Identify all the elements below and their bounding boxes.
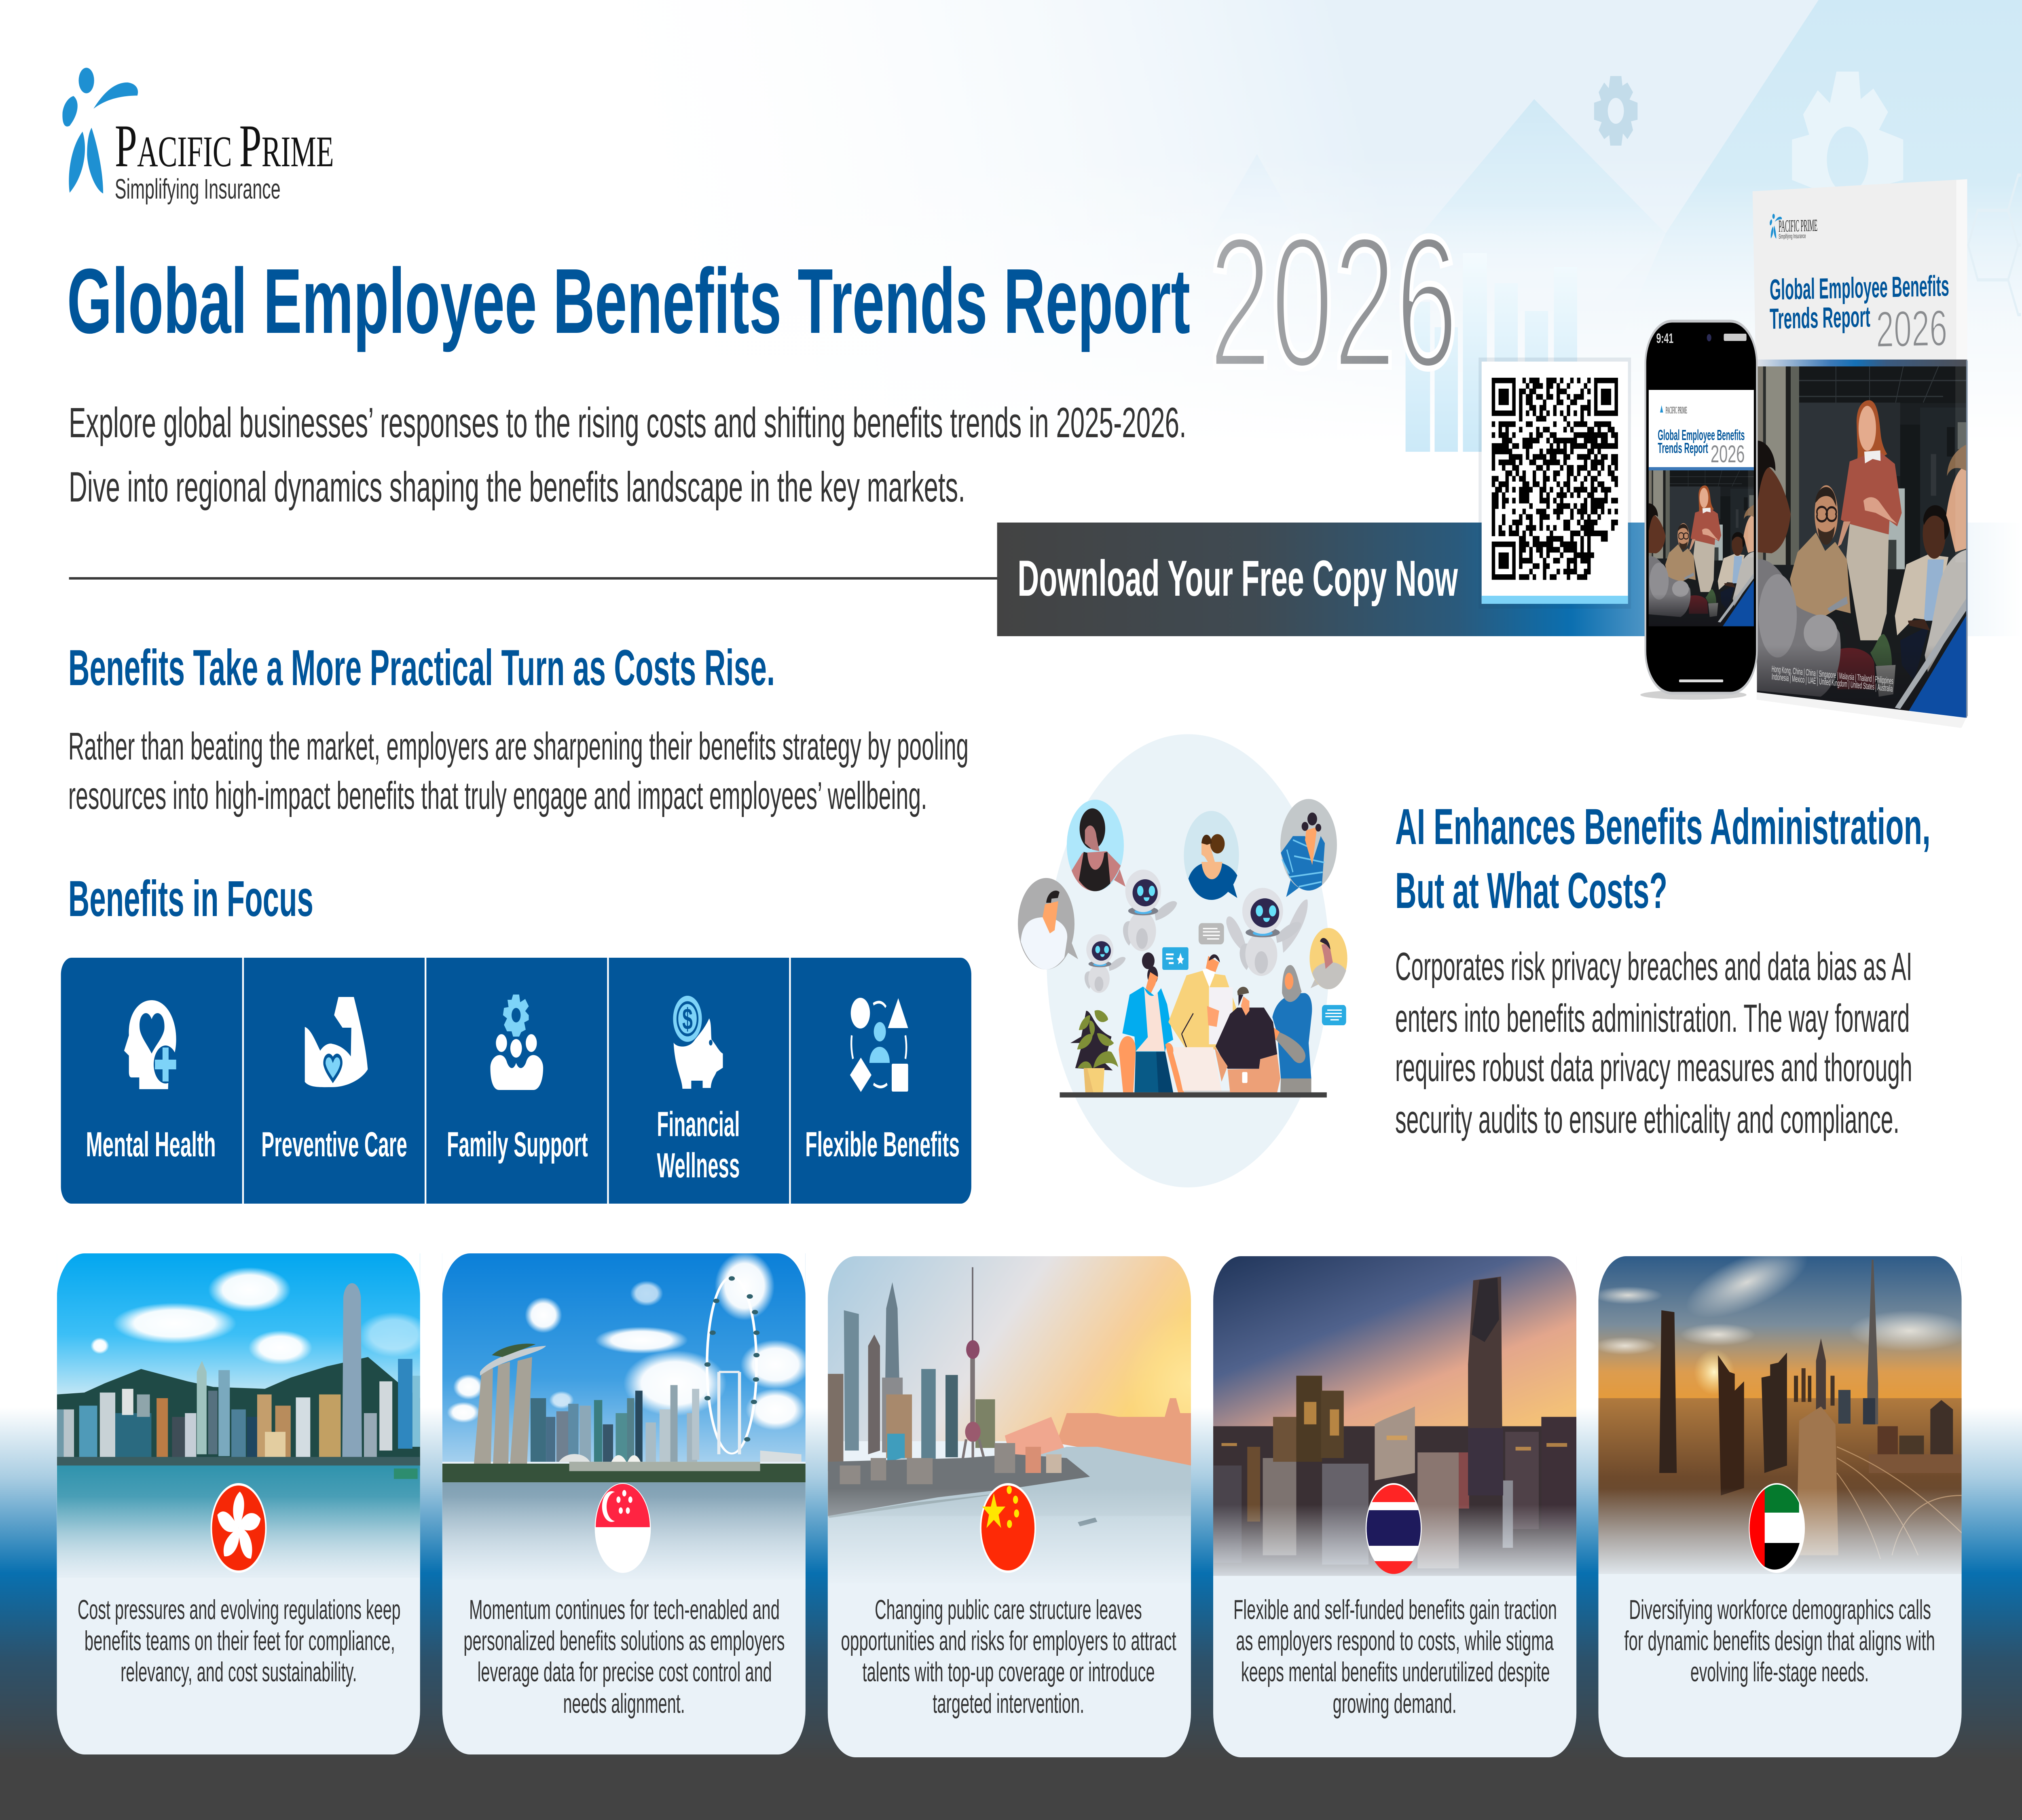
text: UAE: for dynamic benefits design that aligns with	[1624, 1626, 1935, 1657]
top background wash	[0, 0, 2022, 526]
phone status bar: 9:41	[1656, 331, 1673, 346]
icon: logo figure	[62, 68, 138, 194]
logo: Pacific Prime: PACIFIC PRIME	[115, 113, 334, 180]
flag: Thailand	[1366, 1483, 1422, 1574]
text: Thailand	[1233, 1595, 1557, 1719]
download banner	[997, 523, 2022, 636]
text: Thailand: keeps mental benefits underutilized despite	[1241, 1657, 1550, 1688]
woman hijab	[1268, 965, 1312, 1092]
icon: financial wellness	[673, 996, 723, 1089]
section: benefits practical turn: Rather than beating the market, employers are sharpening their benefits strategy by pooling	[68, 725, 969, 768]
avatar: small right man	[1309, 928, 1347, 989]
download banner: Download Your Free Copy Now	[1017, 550, 1458, 607]
card: UAE	[1593, 1232, 1970, 1757]
text: UAE	[1624, 1595, 1935, 1688]
robots	[1123, 870, 1177, 951]
section: benefits practical turn	[68, 640, 969, 817]
book cover text: 2026	[1876, 300, 1948, 358]
photo: Bangkok skyline	[1213, 1254, 1576, 1592]
section: AI enhances benefits: AI Enhances Benefits Administration,	[1395, 799, 1931, 855]
text: China: targeted intervention.	[933, 1689, 1084, 1719]
flag: Singapore	[595, 1483, 651, 1573]
text: UAE: evolving life-stage needs.	[1690, 1657, 1869, 1688]
text: Thailand: as employers respond to costs, while stigma	[1236, 1626, 1554, 1657]
man dark	[1214, 987, 1280, 1092]
flag: Hong Kong	[211, 1483, 266, 1573]
phone mockup	[1640, 321, 1757, 700]
woman left	[1119, 952, 1184, 1092]
phone screen cover: PACIFIC PRIME	[1666, 405, 1687, 416]
book cover text: Global Employee Benefits	[1770, 269, 1949, 306]
title: Global Employee Benefits Trends Report	[67, 250, 1190, 353]
decorative mountains, gears and bars	[1163, 0, 2022, 452]
logo: Pacific Prime: Simplifying Insurance	[115, 174, 281, 205]
labels	[86, 1105, 960, 1185]
plant	[1070, 1010, 1118, 1092]
text: Singapore: leverage data for precise cost control and	[478, 1657, 772, 1688]
laptop	[1173, 1047, 1239, 1093]
flag: China	[980, 1483, 1036, 1573]
title year 2026: 2026	[1209, 197, 1458, 406]
text: China	[841, 1595, 1176, 1719]
phone screen cover: Global Employee Benefits	[1658, 427, 1745, 443]
section: AI enhances benefits: But at What Costs?	[1395, 863, 1667, 919]
section: AI enhances benefits	[1395, 799, 1931, 1142]
text: Thailand: growing demand.	[1333, 1689, 1457, 1719]
QR code card	[1478, 358, 1631, 609]
intro text	[69, 399, 1187, 511]
phone screen cover: Trends Report	[1658, 440, 1708, 456]
man yellow	[1168, 954, 1237, 1050]
text: UAE: Diversifying workforce demographics calls	[1629, 1595, 1931, 1625]
icon: mental health	[124, 1000, 178, 1089]
photo: Shanghai skyline	[828, 1254, 1258, 1592]
icon: preventive care	[305, 997, 368, 1087]
book cover text: Simplifying Insurance	[1779, 232, 1806, 240]
text: China: talents with top-up coverage or introduce	[862, 1657, 1155, 1688]
text: Hong Kong: relevancy, and cost sustainability.	[121, 1657, 357, 1688]
labels: Financial	[657, 1105, 740, 1144]
book cover small logo	[1770, 214, 1782, 239]
text: Singapore: personalized benefits solutions as employers	[463, 1626, 785, 1657]
text: Hong Kong	[78, 1595, 401, 1688]
book cover text: Indonesia | Mexico | UAE | United Kingdom | United States | Australia	[1771, 671, 1893, 694]
icon: flexible benefits	[850, 998, 908, 1092]
labels: Wellness	[657, 1146, 740, 1185]
labels: Flexible Benefits	[805, 1125, 960, 1164]
photo: Dubai skyline	[1593, 1232, 1970, 1592]
avatar: man with striped shirt	[1280, 799, 1337, 897]
avatar: woman with bun	[1184, 811, 1239, 900]
avatar: woman with afro	[1067, 800, 1125, 891]
book cover text: PACIFIC PRIME	[1779, 216, 1817, 236]
phone screen photo	[1649, 470, 1754, 626]
phone screen cover: 2026	[1711, 440, 1745, 468]
card: Singapore	[442, 1251, 811, 1754]
text: Thailand: Flexible and self-funded benefits gain traction	[1233, 1595, 1557, 1625]
QR pattern	[1492, 381, 1618, 577]
section: benefits practical turn: resources into high-impact benefits that truly engage and impact employees’ wellbeing.	[68, 774, 927, 817]
chat chips	[1162, 923, 1346, 1025]
labels: Mental Health	[86, 1125, 216, 1164]
card: Hong Kong	[57, 1252, 430, 1754]
flag: UAE	[1749, 1483, 1805, 1573]
labels: Preventive Care	[261, 1125, 407, 1164]
panel: benefits in focus bar	[61, 958, 971, 1204]
book cover text: Hong Kong, China | China | Singapore | Malaysia | Thailand | Philippines	[1771, 664, 1893, 686]
robot small	[1085, 934, 1125, 993]
phone screen cover	[1649, 390, 1754, 470]
text: China: opportunities and risks for employers to attract	[841, 1626, 1176, 1657]
photo: Singapore skyline	[442, 1251, 811, 1589]
icon: family support	[490, 995, 543, 1090]
text: Hong Kong: Cost pressures and evolving regulations keep	[78, 1595, 401, 1625]
robot large	[1226, 888, 1308, 976]
phone status bar	[1656, 331, 1747, 346]
section: AI enhances benefits: enters into benefits administration. The way forward	[1395, 997, 1910, 1041]
avatar: left man	[1018, 878, 1078, 969]
intro text: Explore global businesses’ responses to the rising costs and shifting benefits trends in 2025-2026.	[69, 399, 1187, 447]
book cover text: Trends Report	[1770, 301, 1870, 335]
book cover text	[1770, 216, 1949, 694]
section: AI enhances benefits: requires robust data privacy measures and thorough	[1395, 1046, 1912, 1090]
logo: Pacific Prime	[62, 68, 334, 205]
team figures	[1119, 952, 1312, 1093]
text: China: Changing public care structure leaves	[875, 1595, 1142, 1625]
section: AI enhances benefits: Corporates risk privacy breaches and data bias as AI	[1395, 945, 1912, 989]
icon: financial wellness: $	[682, 1003, 693, 1036]
card: China	[828, 1254, 1258, 1757]
text: Singapore: needs alignment.	[563, 1689, 685, 1719]
card: Thailand	[1213, 1254, 1576, 1757]
text: Singapore	[463, 1595, 785, 1719]
text: Singapore: Momentum continues for tech-enabled and	[469, 1595, 780, 1625]
intro text: Dive into regional dynamics shaping the benefits landscape in the key markets.	[69, 463, 965, 511]
photo lower edge	[1751, 692, 1969, 740]
photo: Hong Kong skyline	[57, 1252, 430, 1589]
labels: Family Support	[447, 1125, 588, 1164]
heading: benefits in focus: Benefits in Focus	[68, 871, 313, 927]
section: benefits practical turn: Benefits Take a More Practical Turn as Costs Rise.	[68, 640, 775, 696]
section: AI enhances benefits: security audits to ensure ethicality and compliance.	[1395, 1098, 1899, 1142]
illustration: AI and people	[1018, 734, 1347, 1187]
text: Hong Kong: benefits teams on their feet for compliance,	[85, 1626, 395, 1657]
report book mockup	[1751, 179, 1969, 740]
book cover photo	[1757, 366, 1967, 717]
